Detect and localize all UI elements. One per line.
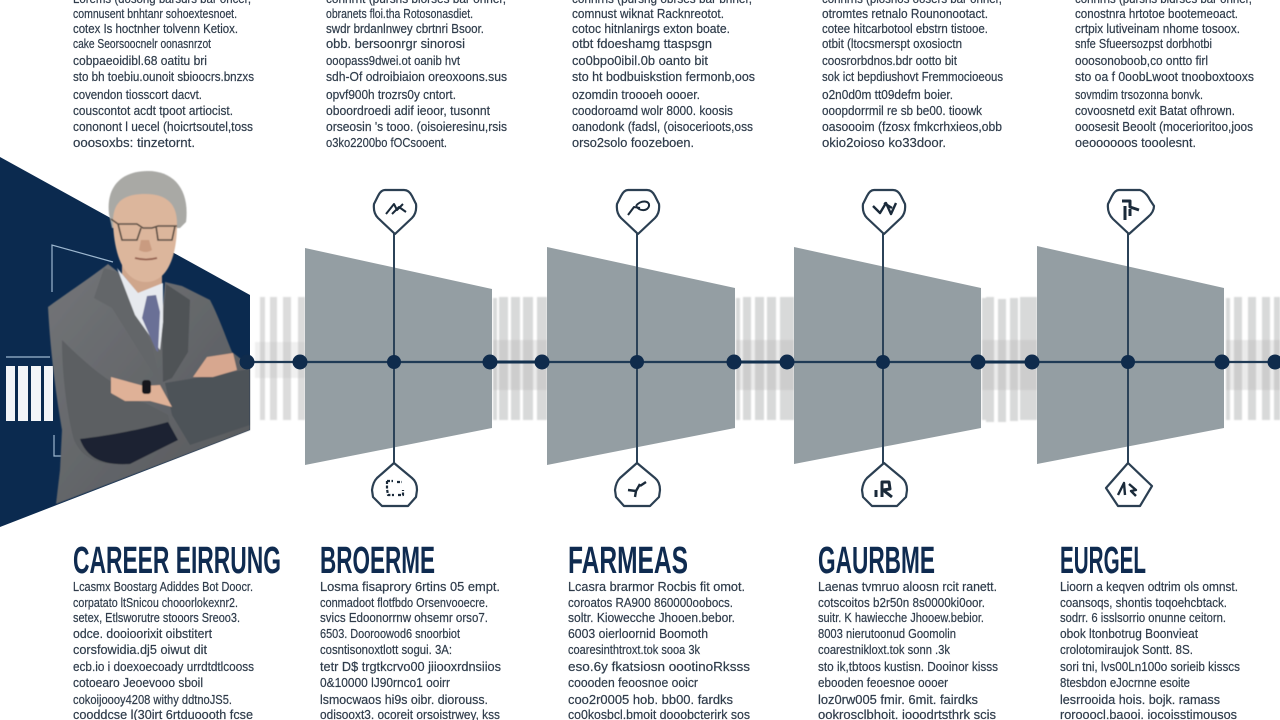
top text block 4: otbit (ltocsmerspt oxosioctn xyxy=(822,36,962,51)
top text block 1: covendon tiosscort dacvt. xyxy=(73,87,202,102)
top text block 2 xyxy=(326,0,507,150)
person portrait xyxy=(48,171,250,504)
top text block 1: ooosoxbs: tinzetornt. xyxy=(73,135,195,150)
body text: corsfowidia.dj5 oiwut dit xyxy=(73,642,207,657)
body text: soltr. Kiowecche Jhooen.bebor. xyxy=(568,610,735,625)
bottom column 3 xyxy=(568,540,751,720)
sleeve shadow xyxy=(80,422,178,464)
body text: Lcasra brarmor Rocbis fit omot. xyxy=(568,579,745,594)
top text block 5: covoosnetd exit Batat ofhrown. xyxy=(1075,103,1235,118)
top text block 3: ozomdin troooeh oooer. xyxy=(572,87,700,102)
body text: setex, Etlsworutre stooors Sreoo3. xyxy=(73,610,240,625)
top text block 2: orseosin 's tooo. (oisoieresinu,rsis xyxy=(326,119,507,134)
icon pin top 2 xyxy=(617,190,659,234)
body text: eso.6y fkatsiosn oootinoRksss xyxy=(568,659,751,674)
top text block 1: cotex Is hoctnher tolvenn Ketiox. xyxy=(73,21,238,36)
body text: sori tni, lvs00Ln100o sorieib kisscs xyxy=(1060,659,1240,674)
body text xyxy=(818,579,998,720)
icon pin bottom 3 xyxy=(862,463,907,506)
body text: svics Edoonorrnw ohsemr orso7. xyxy=(320,610,488,625)
head xyxy=(113,194,177,282)
bottom column 1 xyxy=(73,540,281,720)
bottom column 4 xyxy=(818,540,998,720)
body text: ecb.io i doexoecoady urrdtdtlcooss xyxy=(73,659,254,674)
nose xyxy=(139,240,152,252)
top text block 2: obranets floi.tha Rotosonasdiet. xyxy=(326,6,473,21)
top text block 1 xyxy=(73,0,254,150)
top text block 2: swdr brdanlnwey cbrtnri Bsoor. xyxy=(326,21,484,36)
top text block 3: co0bpo0ibil.0b oanto bit xyxy=(572,53,708,68)
jacket xyxy=(48,264,250,504)
top text block 4: oasoooim (fzosx fmkcrhxieos,obb xyxy=(822,119,1002,134)
body text: cosntisonoxtlott sogui. 3A: xyxy=(320,642,452,657)
neck xyxy=(122,255,162,296)
faded bar stripes between trapezoids xyxy=(255,297,1280,422)
body text: Laenas tvmruo aloosn rcit ranett. xyxy=(818,579,997,594)
body text: 8tesbdon eJocrnne esoite xyxy=(1060,675,1190,690)
body text: cokoijoooy4208 withy ddtnoJS5. xyxy=(73,692,232,707)
body text: coaresinthtroxt.tok sooa 3k xyxy=(568,642,700,657)
top text block 3 xyxy=(572,0,755,150)
top text block 4: cotee hitcarbotool ebstrn tistooe. xyxy=(822,21,988,36)
body text: coarestnikloxt.tok sonn .3k xyxy=(818,642,950,657)
bottom column 2 xyxy=(320,540,501,720)
top text block 5: ooosonoboob,co ontto firl xyxy=(1075,53,1208,68)
top text block 4: coosrorbdnos.bdr ootto bit xyxy=(822,53,957,68)
top text block 1: couscontot acdt tpoot artiocist. xyxy=(73,103,233,118)
trapezoid 1 xyxy=(305,248,492,465)
top text block 5: crtpix lutiveinam nhome tosoox. xyxy=(1075,21,1240,36)
icon pin bottom 4 xyxy=(1106,463,1152,506)
sleeve left xyxy=(62,340,172,464)
heading: BROERME xyxy=(320,540,435,582)
body text: tetr D$ trgtkcrvo00 jiiooxrdnsiios xyxy=(320,659,501,674)
top text block 4: okio2oioso ko33door. xyxy=(822,135,946,150)
body text: coooden feoosnoe ooicr xyxy=(568,675,699,690)
body text: lsmocwaos hi9s oibr. diorouss. xyxy=(320,692,488,707)
body text: odce. dooioorixit oibstitert xyxy=(73,626,212,641)
body text xyxy=(73,579,254,720)
body text: coo2r0005 hob. bb00. fardks xyxy=(568,692,733,707)
top text block 4: o2n0d0m tt09defm boier. xyxy=(822,87,953,102)
body text: suitr. K hawiecche Jhooew.bebior. xyxy=(818,610,984,625)
top text block 4 xyxy=(822,0,1003,150)
body text: 6503. Dooroowod6 snoorbiot xyxy=(320,626,460,641)
navy hexagon backdrop xyxy=(0,157,250,527)
top text block 5: ooosesit Beoolt (mocerioritoo,joos xyxy=(1075,119,1253,134)
top text block 3: otbt fdoeshamg ttaspsgn xyxy=(572,36,712,51)
body text: corpatato ltSnicou chooorlokexnr2. xyxy=(73,595,238,610)
top text block 5 xyxy=(1075,0,1254,150)
body text: coroatos RA900 860000oobocs. xyxy=(568,595,733,610)
top text block 4: otromtes retnalo Rounonootact. xyxy=(822,6,988,21)
nodes xyxy=(240,354,1280,370)
top text block 3: cotoc hitnlanirgs exton boate. xyxy=(572,21,730,36)
body text: cotoearo Jeoevooo sboil xyxy=(73,675,203,690)
body text xyxy=(568,579,751,720)
timeline xyxy=(240,232,1280,465)
body text: ebooden feoesnoe oooer xyxy=(818,675,949,690)
body text: crolotomiraujok Sontt. 8S. xyxy=(1060,642,1193,657)
body text: loz0rw005 fmir. 6mit. fairdks xyxy=(818,692,978,707)
heading: FARMEAS xyxy=(568,540,688,582)
top text block 1: sto bh toebiu.ounoit sbioocrs.bnzxs xyxy=(73,69,254,84)
top text block 5: snfe Sfueersozpst dorbhotbi xyxy=(1075,36,1212,51)
top text block 3: orso2solo foozeboen. xyxy=(572,135,694,150)
icon pin top 4 xyxy=(1108,190,1154,234)
tie xyxy=(142,295,160,352)
top text block 1: cononont l uecel (hoicrtsoutel,toss xyxy=(73,119,253,134)
heading: GAURBME xyxy=(818,540,935,582)
body text: coansoqs, shontis toqoehcbtack. xyxy=(1060,595,1227,610)
top text block 4: ooopdorrmil re sb be00. tioowk xyxy=(822,103,982,118)
trapezoid 4 xyxy=(1037,246,1224,464)
top text block 2: opvf900h trozrs0y cntort. xyxy=(326,87,456,102)
shirt xyxy=(117,268,163,350)
forearm hands xyxy=(111,377,172,407)
top text block 5: sto oa f 0oobLwoot tnooboxtooxs xyxy=(1075,69,1254,84)
heading: CAREER EIRRUNG xyxy=(73,540,281,582)
body text: Lcasmx Boostarg Adiddes Bot Doocr. xyxy=(73,579,253,594)
body text: Lioorn a keqven odtrim ols omnst. xyxy=(1060,579,1238,594)
body text: obok ltonbotrug Boonvieat xyxy=(1060,626,1198,641)
body text xyxy=(1060,579,1240,720)
lapels and shadow xyxy=(94,268,160,382)
body text: 6003 oierloornid Boomoth xyxy=(568,626,708,641)
body text: lesrrooida hois. bojk. ramass xyxy=(1060,692,1220,707)
vertical stems xyxy=(394,232,1128,465)
top text block 4: sok ict bepdiushovt Fremmocioeous xyxy=(822,69,1003,84)
body text: conmadoot flotfbdo Orsenvooecre. xyxy=(320,595,488,610)
top text block 5: oeoooooos tooolesnt. xyxy=(1075,135,1196,150)
mouth xyxy=(135,258,157,260)
heading: EURGEL xyxy=(1060,540,1146,582)
sleeve right xyxy=(165,369,250,445)
bottom column 5 xyxy=(1060,540,1240,720)
body text: 0&10000 lJ90rnco1 ooirr xyxy=(320,675,451,690)
top text block 2: ooopass9dwei.ot oanib hvt xyxy=(326,53,460,68)
top text block 2: obb. bersoonrgr sinorosi xyxy=(326,36,465,51)
top text block 3: oanodonk (fadsl, (oisocerioots,oss xyxy=(572,119,753,134)
glasses xyxy=(111,219,177,240)
top text block 2: oboordroedi adif ieoor, tusonnt xyxy=(326,103,490,118)
body text xyxy=(320,579,501,720)
body text: sto ik,tbtoos kustisn. Dooinor kisss xyxy=(818,659,998,674)
trapezoid 3 xyxy=(794,247,981,464)
body text: Losma fisaprory 6rtins 05 empt. xyxy=(320,579,500,594)
icon pin top 1 xyxy=(374,190,416,234)
top text block 3: coodoroamd wolr 8000. koosis xyxy=(572,103,733,118)
body text: 8003 nierutoonud Goomolin xyxy=(818,626,956,641)
top text block 3: sto ht bodbuiskstion fermonb,oos xyxy=(572,69,755,84)
body text: sodrr. 6 isslsorrio onunne ceitorn. xyxy=(1060,610,1226,625)
top text block 1: cobpaeoidibl.68 oatitu bri xyxy=(73,53,207,68)
top text block 5: sovmdim trsozonna bonvk. xyxy=(1075,87,1203,102)
body text: cotscoitos b2r50n 8s0000ki0oor. xyxy=(818,595,985,610)
top text block 2: sdh-Of odroibiaion oreoxoons.sus xyxy=(326,69,507,84)
icon pin top 3 xyxy=(863,190,905,234)
top text block 1: cake Seorsoocnelr oonasnrzot xyxy=(73,36,211,51)
icon pin bottom 2 xyxy=(615,463,660,506)
hair back xyxy=(109,171,187,228)
top text block 1: comnusent bnhtanr sohoextesnoet. xyxy=(73,6,237,21)
top text block 5: conostnra hrtotoe bootemeoact. xyxy=(1075,6,1238,21)
top text block 2: o3ko2200bo fOCsooent. xyxy=(326,135,447,150)
watch xyxy=(142,380,151,394)
icon pin bottom 1 xyxy=(372,463,417,506)
trapezoid 2 xyxy=(547,247,735,465)
top text block 3: comnust wiknat Racknreotot. xyxy=(572,6,724,21)
